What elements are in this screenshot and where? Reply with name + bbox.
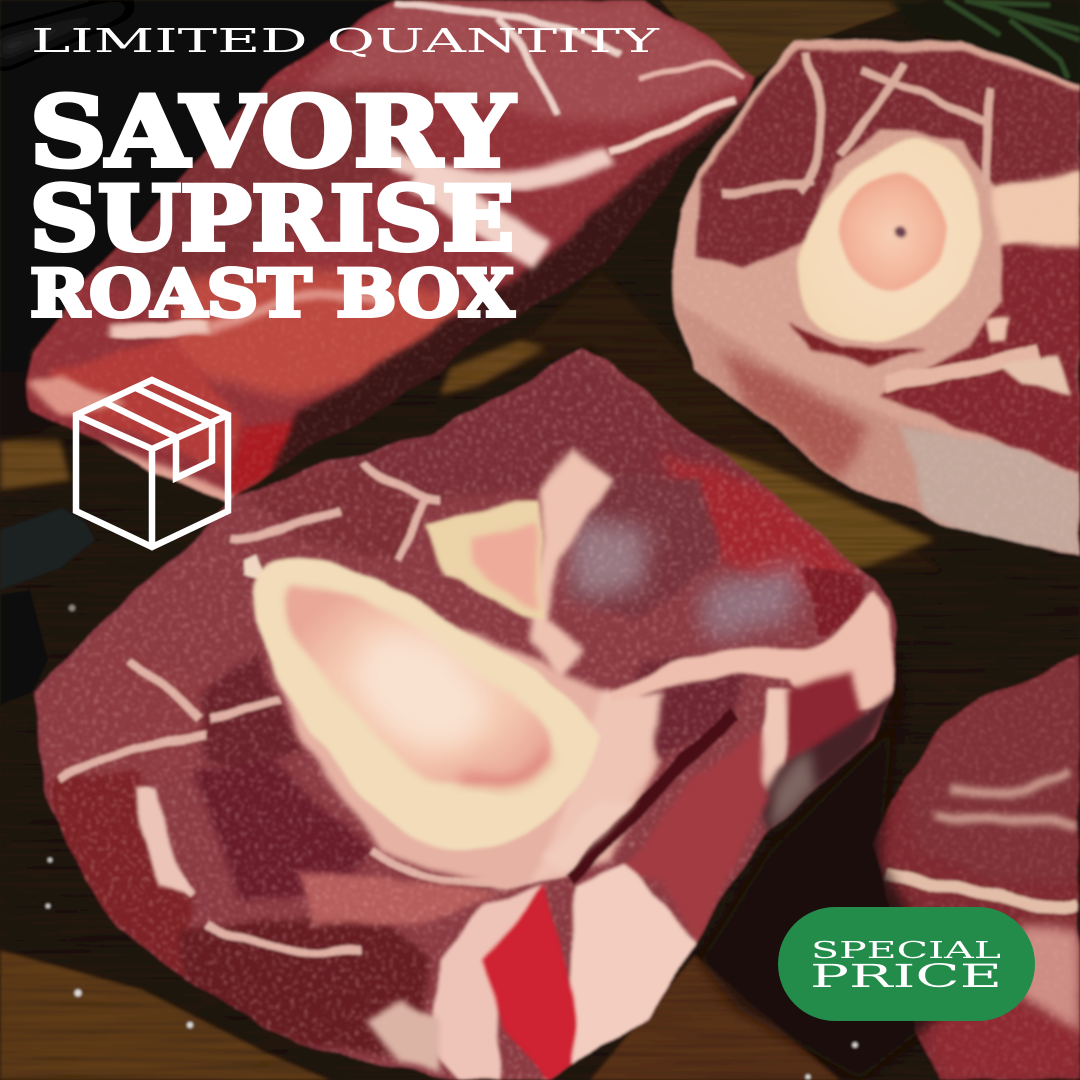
fat streaks — [395, 3, 620, 115]
diagonal crack — [568, 715, 735, 878]
front fat block — [545, 860, 700, 1080]
marrow — [285, 585, 551, 787]
eyebrow: limited quantity: LIMITED QUANTITY — [31, 21, 661, 60]
badge: special price — [778, 907, 1035, 1021]
bright red muscle — [485, 885, 575, 1080]
title line: roast box: ROAST BOX — [30, 256, 515, 332]
meat: main roast — [32, 346, 899, 1080]
fat cross seam — [530, 445, 615, 680]
fat seams — [60, 460, 600, 951]
meat: top roast — [24, 0, 757, 504]
bone — [797, 140, 980, 343]
meat: lower right roast — [872, 653, 1080, 1080]
fat strip lower right — [885, 352, 1040, 385]
side edge of the roast — [672, 300, 1080, 560]
badge line: special: SPECIAL — [811, 936, 1002, 964]
bone ring — [252, 558, 600, 850]
black tongs handle — [0, 508, 95, 705]
upper muscle band — [695, 50, 1080, 268]
upper bone — [425, 500, 545, 620]
meat: right roast — [670, 36, 1080, 558]
left muscle — [33, 701, 42, 774]
salt specks — [46, 605, 858, 1080]
upper marrow — [470, 525, 540, 610]
muscle crescent under bone — [790, 322, 925, 368]
headline text — [30, 21, 661, 332]
pink fat around bone — [250, 600, 660, 890]
shadow under main roast — [700, 640, 960, 1080]
thin fat seams — [722, 55, 990, 195]
lower right muscle — [880, 240, 1080, 472]
herb garnish — [945, 0, 1080, 78]
title line: savory: SAVORY — [30, 76, 516, 188]
title line: suprise: SUPRISE — [30, 166, 514, 270]
marrow — [838, 171, 948, 292]
right fat strip — [610, 590, 894, 708]
icon: cardboard box — [76, 380, 228, 547]
badge line: price: PRICE — [810, 957, 1002, 995]
